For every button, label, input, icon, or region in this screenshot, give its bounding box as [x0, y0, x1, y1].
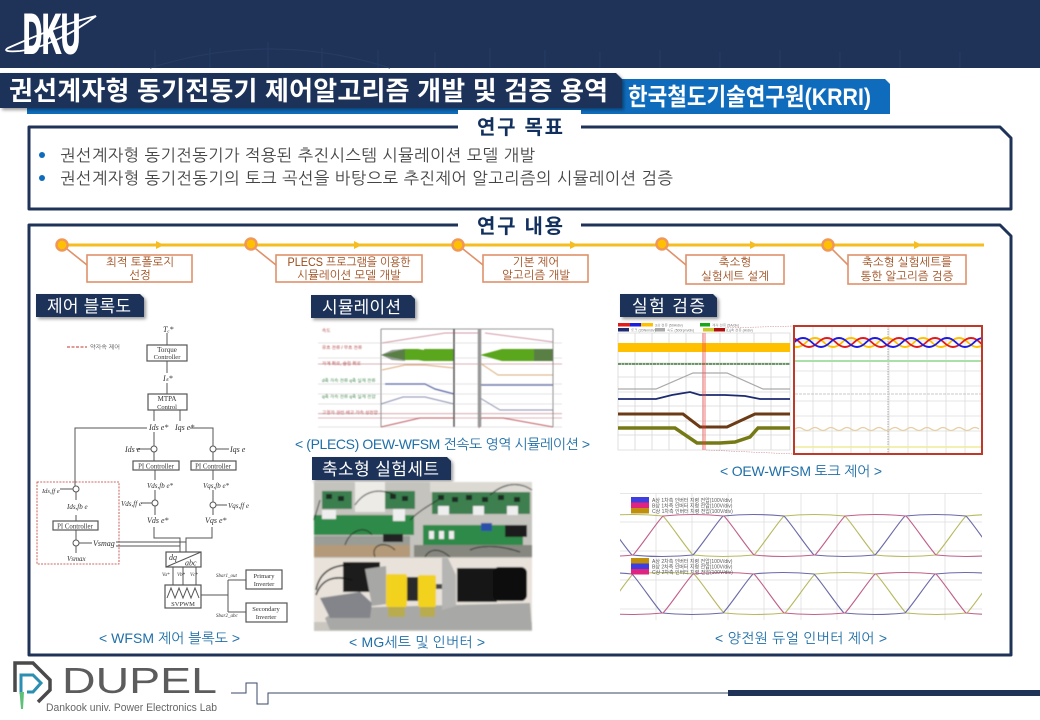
block: dq/abc: abc [185, 558, 197, 568]
trace labels [322, 328, 379, 415]
legend: primary inverter: C상 1차측 인버터 지령 전압(100V/div) [652, 508, 733, 515]
trace labels: d축 자속 전류 q축 실제 전류 [322, 378, 376, 383]
legend: primary inverter: B상 1차측 인버터 지령 전압(100V/div) [652, 502, 733, 510]
signal labels: Iqs e* [174, 423, 194, 432]
signal labels: Vsmag [93, 539, 115, 548]
traces [618, 343, 790, 352]
legend: secondary inverter: A상 2차측 인버터 지령 전압(100V/div) [652, 558, 733, 565]
block: secondary inverter [246, 603, 287, 622]
section label: experimental verification [620, 294, 717, 317]
step 5 [822, 240, 966, 284]
step 1: 최적 토폴로지 [106, 256, 174, 269]
signal labels: Vds,ff e [121, 500, 142, 508]
legend: 속도 (500rpm/div) [667, 328, 694, 332]
signal labels: Vb* [177, 573, 186, 578]
block: MTPA: Control [157, 404, 177, 411]
block: SVPWM [165, 585, 201, 608]
block: primary inverter: Inverter [254, 581, 275, 588]
header band [0, 0, 1040, 68]
timeline [56, 238, 984, 284]
chart: dual inverter waveform [620, 493, 982, 620]
signal labels: Vqs,fb e* [203, 482, 230, 490]
block: PI q [191, 461, 236, 470]
bullet list: 권선계자형 동기전동기의 토크 곡선을 바탕으로 추진제어 알고리즘의 시뮬레이션 검증 [60, 170, 673, 188]
banner: client KRRI [27, 79, 890, 114]
signal labels: Iqs e [229, 445, 246, 454]
cursors and frame [381, 329, 553, 427]
section label: simulation [311, 295, 415, 318]
block: PI field [53, 521, 98, 530]
step 3 [452, 240, 588, 282]
title bar: 권선계자형 동기전동기 제어알고리즘 개발 및 검증 용역 [9, 76, 608, 106]
step 4: 실험세트 설계 [701, 270, 769, 283]
logo: DKU [6, 2, 96, 65]
signal labels: Va* [162, 573, 170, 578]
dashed field-weakening region [37, 482, 119, 564]
section label: control block diagram [36, 294, 144, 317]
inverter boards [314, 482, 532, 558]
signal labels: Ids,ff e [41, 488, 60, 495]
panel: research goals [29, 110, 1011, 209]
signal labels: Vc* [190, 573, 198, 578]
photo: inverter boards and MG set [314, 482, 532, 631]
signal labels: Ids e [124, 445, 141, 454]
signal labels [41, 325, 249, 619]
logo: DKU: DKU [23, 2, 80, 65]
block: MTPA [148, 394, 187, 411]
block: PI d [133, 461, 179, 470]
trace labels: q축 자속 전류 q축 실제 전압 [322, 394, 376, 399]
step 3: 기본 제어 [513, 256, 559, 269]
block: MTPA: MTPA [158, 395, 176, 403]
block: primary inverter: Primary [254, 573, 275, 580]
block: torque controller [147, 345, 187, 361]
trace labels: 유효 전류 / 무효 전류 [322, 345, 363, 350]
chart: torque control waveform [618, 323, 794, 454]
MG set [314, 558, 532, 631]
chart: zoomed torque waveform [793, 325, 983, 455]
trace labels: 속도 [322, 328, 331, 333]
legend: secondary inverter [631, 558, 733, 576]
bullet list: 권선계자형 동기전동기가 적용된 추진시스템 시뮬레이션 모델 개발 [60, 147, 535, 165]
caption: MG set: < MG세트 및 인버터 > [349, 634, 485, 650]
legend: field weakening: 약자속 제어 [90, 344, 120, 351]
chart: PLECS simulation [318, 328, 562, 428]
block: dq/abc: dq [169, 553, 177, 562]
caption: block diagram: < WFSM 제어 블록도 > [99, 630, 240, 646]
step 2 [246, 238, 422, 282]
footer logo: DUPEL: DUPEL [62, 660, 217, 701]
trace labels: 고정자 권선 쇄교 자속 상전압 [322, 410, 379, 415]
legend: secondary inverter: C상 2차측 인버터 지령 전압(100V/div) [652, 569, 733, 576]
caption: simulation: < (PLECS) OEW-WFSM 전속도 영역 시뮬레이션 > [295, 436, 590, 452]
block: dq/abc [166, 552, 201, 568]
heading: research goals: 연구 목표 [477, 116, 563, 139]
block diagram [37, 325, 287, 622]
footer logo: DUPEL: Dankook univ. Power Electronics Lab [46, 702, 217, 714]
block: torque controller: Torque [157, 346, 177, 354]
trace labels: 자계 회로, 슬립 회로 [322, 361, 362, 366]
section label: control block diagram: 제어 블록도 [47, 297, 131, 316]
step 4: 축소형 [719, 256, 751, 269]
block: torque controller: Controller [154, 354, 181, 361]
block: PI q: PI Controller [195, 464, 232, 470]
signal wires [60, 333, 246, 612]
legend: 3상 전류 (50A/div) [655, 324, 683, 328]
block: PI field: PI Controller [57, 524, 94, 530]
signal labels: Sbar2_abc [216, 614, 238, 619]
heading: research content: 연구 내용 [477, 215, 563, 238]
legend: primary inverter [631, 497, 733, 515]
step 4 [656, 238, 784, 284]
signal labels: Tₑ* [163, 325, 174, 334]
footer pulse line [231, 683, 1040, 704]
panel: research content [29, 212, 1011, 655]
section label: simulation: 시뮬레이션 [322, 298, 401, 317]
signal labels: Ids,fb e [66, 503, 88, 511]
horizontal grid [318, 343, 562, 427]
step 5: 축소형 실험세트를 [862, 256, 952, 269]
step 1: 선정 [129, 269, 151, 282]
banner: client KRRI: 한국철도기술연구원(KRRI) [628, 84, 871, 111]
time-domain traces [382, 333, 553, 343]
block: secondary inverter: Inverter [256, 614, 277, 621]
caption: torque control: < OEW-WFSM 토크 제어 > [720, 463, 882, 479]
signal labels: Vqs,ff e [228, 502, 249, 510]
legend: primary inverter: A상 1차측 인버터 지령 전압(100V/div) [652, 497, 733, 504]
step 1 [56, 240, 192, 282]
step 2: 시뮬레이션 모델 개발 [297, 269, 401, 282]
footer logo: DUPEL [15, 660, 217, 714]
legend: field weakening [67, 344, 120, 351]
summing junctions [73, 446, 216, 546]
legend: d,q축 전류 (A/div) [726, 328, 753, 332]
caption: dual inverter: < 양전원 듀얼 인버터 제어 > [715, 630, 887, 646]
legend: secondary inverter: B상 2차측 인버터 지령 전압(100V/div) [652, 564, 733, 570]
signal labels: Vsmax [67, 555, 87, 563]
step 3: 알고리즘 개발 [502, 269, 570, 282]
section label: experimental verification: 실험 검증 [632, 297, 705, 316]
signal labels: Ids e* [148, 423, 168, 432]
bullet list [39, 147, 673, 188]
signal labels: Iₛ* [162, 374, 173, 383]
signal labels: Vds,fb e* [147, 482, 174, 490]
signal labels: Vds e* [147, 516, 169, 525]
step 5: 통한 알고리즘 검증 [861, 270, 954, 283]
block: primary inverter [246, 570, 282, 589]
legend [618, 323, 753, 332]
block: SVPWM: SVPWM [171, 601, 195, 608]
block: PI d: PI Controller [138, 464, 175, 470]
signal labels: Sbar1_out [216, 574, 237, 579]
section label: scaled test set: 축소형 실험세트 [322, 460, 439, 479]
legend: 계자 전류 (5A/div) [712, 324, 739, 328]
green voltage envelope [381, 349, 553, 361]
signal labels: Vqs e* [205, 516, 227, 525]
section label: scaled test set [312, 457, 451, 480]
left plot grid [618, 333, 790, 450]
block: secondary inverter: Secondary [252, 606, 280, 613]
legend: 토크 (20Nm/div) [631, 328, 656, 332]
step 2: PLECS 프로그램을 이용한 [288, 256, 411, 269]
